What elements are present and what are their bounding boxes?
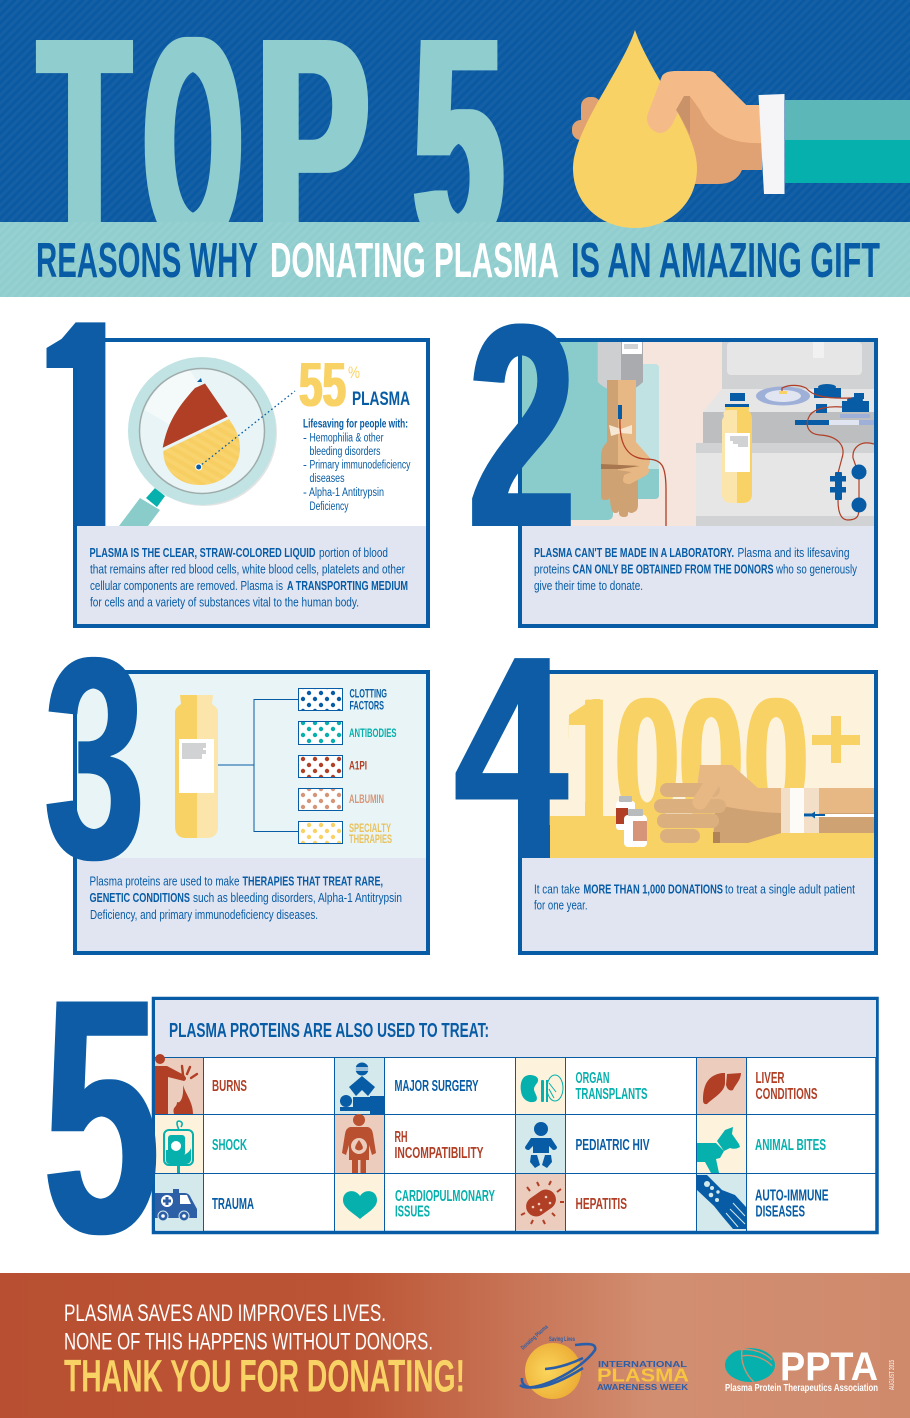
icon: major surgery	[340, 1062, 385, 1114]
list: lifesaving conditions: bleeding disorders	[310, 446, 381, 458]
illustration: 1000+ with fist and vials	[550, 661, 874, 858]
logo: International Plasma Awareness Week	[520, 1324, 689, 1399]
treatment labels: DISEASES	[756, 1204, 805, 1220]
logo: PPTA: PPTA	[780, 1345, 878, 1389]
numeral 4: 4	[454, 603, 567, 891]
footer	[0, 1273, 910, 1418]
subtitle: REASONS WHY	[36, 234, 258, 288]
legend: protein types: A1PI	[349, 758, 367, 772]
treatment labels: HEPATITIS	[576, 1196, 627, 1213]
stat: 55% plasma: 55	[299, 351, 346, 420]
legend: protein types: CLOTTING	[350, 686, 387, 700]
text block: give their time to donate.	[534, 579, 643, 593]
icon: shock (IV bag)	[164, 1121, 193, 1173]
treatment labels: INCOMPATIBILITY	[394, 1145, 484, 1162]
icon: animal bites (dog)	[697, 1127, 740, 1173]
stat: 55% plasma: %	[348, 363, 360, 382]
icon: liver	[703, 1073, 741, 1104]
text block: A TRANSPORTING MEDIUM	[287, 579, 408, 593]
panel 1: what plasma is	[46, 322, 430, 628]
heading	[155, 1000, 876, 1057]
text block: PLASMA CAN'T BE MADE IN A LABORATORY.	[534, 546, 734, 560]
closing message	[64, 1300, 465, 1402]
subtitle band	[0, 222, 910, 297]
list: lifesaving conditions: Alpha-1 Antitrypsin	[309, 487, 384, 499]
icon: burns	[155, 1054, 197, 1114]
icon cell backgrounds	[155, 1058, 746, 1230]
legend: protein types: ANTIBODIES	[349, 726, 396, 740]
subtitle: DONATING PLASMA	[270, 234, 559, 288]
treatment labels: ANIMAL BITES	[755, 1137, 826, 1154]
treatment labels: TRAUMA	[212, 1196, 254, 1213]
treatment labels: TRANSPLANTS	[576, 1086, 648, 1103]
legend: protein types: SPECIALTY	[349, 821, 391, 835]
stat: 55% plasma: PLASMA	[352, 388, 410, 410]
logo: International Plasma Awareness Week: Donating Plasma	[520, 1324, 550, 1351]
logo: International Plasma Awareness Week: AWARENESS WEEK	[597, 1383, 688, 1392]
numeral 2: 2	[467, 265, 577, 588]
icon: hand squeezing plasma drop	[572, 30, 910, 228]
treatment labels: SHOCK	[212, 1137, 247, 1154]
treatment labels: PEDIATRIC HIV	[576, 1137, 650, 1154]
text block: PLASMA IS THE CLEAR, STRAW-COLORED LIQUID	[90, 546, 316, 560]
legend: protein types: THERAPIES	[349, 832, 392, 846]
text block: portion of blood	[319, 546, 388, 560]
illustration: plasma bottle	[175, 695, 218, 838]
logo: PPTA	[725, 1345, 878, 1394]
text block: who so generously	[775, 562, 858, 576]
text block: It can take	[534, 882, 580, 896]
list: lifesaving conditions: Deficiency	[310, 501, 349, 513]
logo: International Plasma Awareness Week: Saving Lives	[549, 1337, 575, 1343]
text block: to treat a single adult patient	[725, 882, 855, 896]
title: TOP 5	[36, 36, 504, 222]
logo: International Plasma Awareness Week: INTERNATIONAL	[598, 1359, 687, 1369]
text block: MORE THAN 1,000 DONATIONS	[584, 882, 723, 896]
numeral 5: 5	[43, 930, 160, 1304]
text block: GENETIC CONDITIONS	[90, 891, 190, 905]
text block: for cells and a variety of substances vital to the human body.	[90, 596, 359, 610]
treatment labels: ISSUES	[395, 1204, 430, 1220]
legend: protein types: ALBUMIN	[349, 792, 384, 806]
text block	[77, 526, 426, 624]
illustration: 1000+ with fist and vials: 1	[564, 663, 619, 858]
logo: International Plasma Awareness Week: PLASMA	[597, 1366, 689, 1386]
numeral 3: 3	[44, 597, 145, 919]
list: lifesaving conditions: diseases	[310, 473, 345, 485]
closing message: PLASMA SAVES AND IMPROVES LIVES.	[64, 1300, 386, 1327]
header background	[0, 0, 910, 222]
numeral 1	[46, 322, 106, 526]
panel 2: cannot be made in a laboratory	[472, 324, 878, 628]
text block: that remains after red blood cells, white blood cells, platelets and other	[90, 562, 405, 576]
illustration: 1000+ with fist and vials: 0	[744, 661, 809, 858]
list: lifesaving conditions: -	[303, 460, 307, 472]
list: lifesaving conditions: -	[303, 432, 307, 444]
icon: kidneys	[521, 1075, 563, 1102]
legend: protein types: FACTORS	[350, 698, 384, 712]
text block	[90, 874, 402, 922]
icon: pediatric HIV (baby)	[525, 1122, 557, 1168]
heading: PLASMA PROTEINS ARE ALSO USED TO TREAT:	[169, 1020, 489, 1042]
list: lifesaving conditions: -	[303, 487, 307, 499]
icon: heart	[343, 1191, 377, 1219]
treatment labels: ORGAN	[576, 1070, 610, 1087]
treatment labels: MAJOR SURGERY	[394, 1078, 479, 1095]
text block	[534, 546, 858, 593]
illustration: 1000+ with fist and vials: 0	[615, 661, 680, 858]
stat: 55% plasma	[299, 351, 410, 420]
text block: proteins	[534, 562, 570, 576]
text block: for one year.	[534, 898, 588, 912]
closing message: NONE OF THIS HAPPENS WITHOUT DONORS.	[64, 1328, 433, 1356]
legend: protein types	[298, 686, 396, 846]
text block: cellular components are removed. Plasma is	[90, 579, 283, 593]
date stamp: AUGUST 2015	[889, 1360, 896, 1390]
illustration: donor arm and plasmapheresis machine	[522, 342, 874, 526]
icon: hepatitis virus	[521, 1181, 564, 1224]
text block: Plasma proteins are used to make	[90, 874, 240, 888]
treatment labels: CONDITIONS	[756, 1086, 818, 1103]
numeral 1: 1	[30, 244, 140, 647]
list: lifesaving conditions	[303, 418, 411, 513]
treatment labels: CARDIOPULMONARY	[395, 1188, 495, 1205]
illustration: 1000+ with fist and vials: 0	[679, 661, 744, 858]
list: lifesaving conditions: Hemophilia & other	[310, 432, 384, 444]
vials	[616, 801, 635, 830]
text block: Plasma and its lifesaving	[738, 546, 850, 560]
list: lifesaving conditions: Primary immunodeficiency	[310, 460, 411, 472]
panel 3: plasma protein therapies	[44, 597, 428, 953]
list: lifesaving conditions: Lifesaving for people with:	[303, 418, 408, 430]
panel 4: more than 1,000 donations	[456, 658, 878, 955]
treatment labels: AUTO-IMMUNE	[755, 1188, 828, 1204]
subtitle	[36, 234, 880, 288]
treatment labels: LIVER	[756, 1070, 784, 1087]
icon: trauma (ambulance)	[155, 1189, 197, 1221]
fist	[713, 788, 874, 843]
text block	[534, 882, 855, 912]
plus sign	[812, 716, 860, 763]
closing message: THANK YOU FOR DONATING!	[64, 1350, 465, 1402]
text block: such as bleeding disorders, Alpha-1 Antitrypsin	[193, 891, 402, 905]
treatment labels: RH	[394, 1129, 408, 1146]
text block: THERAPIES THAT TREAT RARE,	[242, 874, 383, 888]
text block: Deficiency, and primary immunodeficiency diseases.	[90, 908, 318, 922]
text block: CAN ONLY BE OBTAINED FROM THE DONORS	[572, 562, 774, 576]
icon: Rh incompatibility	[342, 1114, 376, 1173]
icon: auto-immune (arm)	[697, 1175, 746, 1229]
panel 5: conditions treated	[43, 930, 877, 1304]
treatment labels: BURNS	[212, 1078, 247, 1095]
connector lines	[218, 700, 298, 832]
treatment labels	[212, 1070, 828, 1220]
icon: magnifying glass with drop	[119, 360, 295, 526]
